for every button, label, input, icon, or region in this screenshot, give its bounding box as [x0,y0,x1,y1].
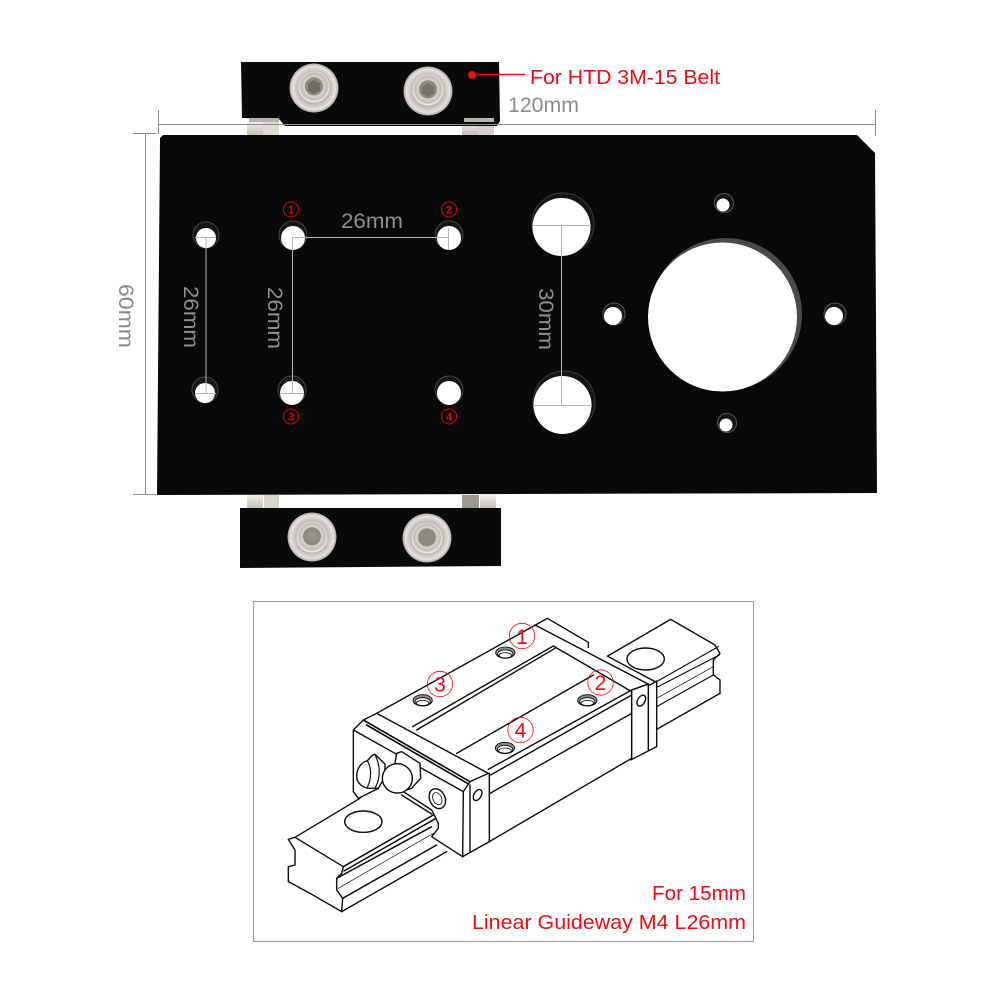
hole markers 1 to 4 [284,202,456,424]
hole markers 1 to 4: 3 [288,412,294,424]
dimension: 26mm inner vertical: 26mm [263,287,286,349]
bolt right [404,66,452,116]
clamp body [241,62,500,126]
marker 1: 1 [516,626,528,649]
marker 1 [509,623,535,649]
carriage body [377,618,657,857]
guideway caption: Linear Guideway M4 L26mm [472,912,746,934]
hole markers 1 to 4: 1 [288,204,294,216]
dimension: 120mm: 120mm [508,94,579,117]
dimension: 60mm: 60mm [114,284,137,348]
marker 3 [427,671,453,697]
dimension: 26mm horizontal: 26mm [341,210,403,233]
bolt left [290,64,338,112]
marker 2 [588,670,613,695]
clamp nuts [247,495,496,508]
grease nipple [357,752,421,793]
guideway holes 1 to 4 and rail holes [192,221,463,405]
guideway caption [472,883,746,934]
top belt clamp [241,62,500,135]
panel: linear guideway [254,602,754,942]
marker 2: 2 [595,672,606,695]
hole markers 1 to 4: 4 [446,412,453,424]
bottom belt clamp [240,495,501,568]
guideway line drawing [288,618,720,912]
end cap [353,713,488,857]
hole markers 1 to 4: 2 [446,204,452,216]
dimension: 26mm left vertical: 26mm [179,286,202,348]
marker 4: 4 [515,720,527,742]
clamp body [240,508,501,568]
guideway caption: For 15mm [652,883,746,905]
motor screw holes [603,194,846,432]
marker 3: 3 [434,674,446,696]
right rail [607,619,720,729]
mounting holes [413,647,597,754]
bolt right [402,514,452,562]
30mm holes [532,193,595,434]
bolt left [288,512,336,562]
motor hole [648,238,802,392]
left rail [288,798,447,912]
mounting plate [157,135,877,495]
belt callout: For HTD 3M-15 Belt [530,67,720,89]
dimension: 30mm: 30mm [534,288,557,350]
marker 4 [508,717,533,743]
clamp nuts [247,122,494,135]
